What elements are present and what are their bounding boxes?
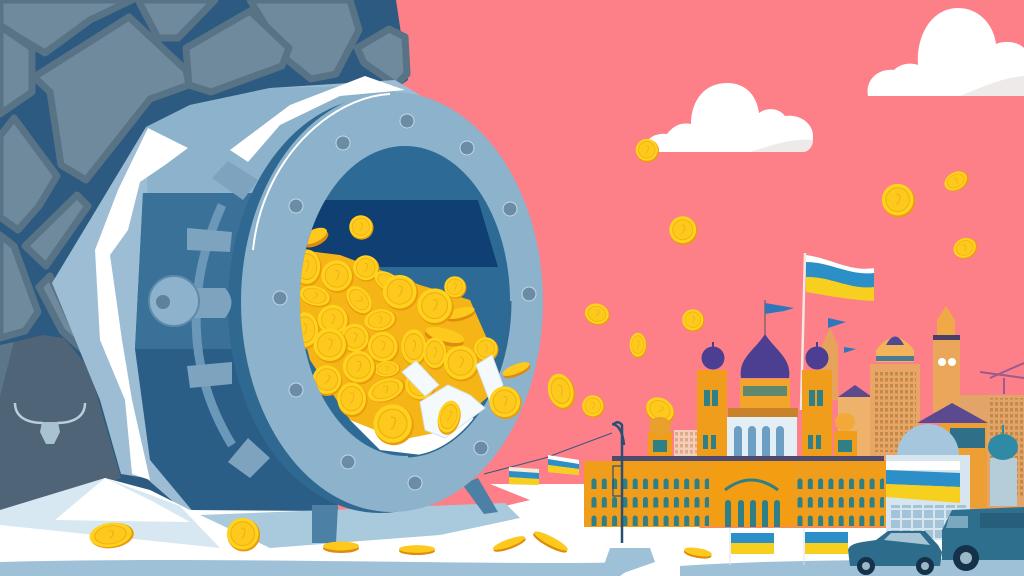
mini window block	[674, 430, 698, 458]
coin pile	[291, 224, 498, 456]
coins flying right	[544, 139, 981, 429]
hinge ring	[196, 205, 232, 445]
main block	[612, 456, 884, 461]
teal dome	[990, 458, 1017, 506]
tan building	[838, 397, 874, 461]
center drum and dome	[740, 379, 790, 411]
cloud: middle	[645, 83, 813, 152]
pennant flags	[765, 300, 856, 353]
crane	[980, 363, 1024, 394]
right blocks	[960, 395, 1024, 515]
hinges and lock	[149, 161, 270, 478]
pavilion	[940, 420, 987, 508]
coins spilling from vault	[349, 215, 532, 437]
car	[848, 531, 942, 575]
vault body	[52, 76, 420, 530]
ice blocks	[402, 355, 503, 438]
left tower	[697, 370, 727, 462]
icon: bull skull	[15, 403, 85, 444]
coins on ground	[88, 518, 712, 560]
main flag	[801, 253, 874, 410]
rock wall	[0, 0, 408, 525]
ground flags	[730, 528, 848, 565]
city background	[674, 306, 1024, 540]
vault door feet	[312, 478, 498, 543]
street lamp	[612, 422, 624, 543]
van	[942, 507, 1024, 571]
lock wheel	[190, 288, 232, 318]
large ukrainian flag	[886, 461, 960, 503]
collar	[52, 80, 420, 530]
vault door ring	[228, 92, 543, 513]
white hall	[727, 417, 797, 461]
ground snow	[0, 478, 1024, 576]
tall domed tower	[870, 364, 920, 460]
cloud: upper right	[868, 8, 1024, 96]
side towers	[648, 432, 672, 458]
small flags and wire	[484, 433, 612, 485]
snow on collar	[95, 128, 188, 480]
glass dome building	[897, 424, 959, 455]
right tower	[802, 370, 832, 462]
rivets	[273, 114, 536, 490]
palace	[584, 334, 886, 527]
clock tower	[933, 340, 960, 412]
stone: lower dark	[0, 335, 121, 515]
minor spire	[822, 328, 838, 400]
vault interior	[300, 146, 510, 456]
barrel	[135, 193, 340, 525]
stones	[0, 0, 407, 353]
